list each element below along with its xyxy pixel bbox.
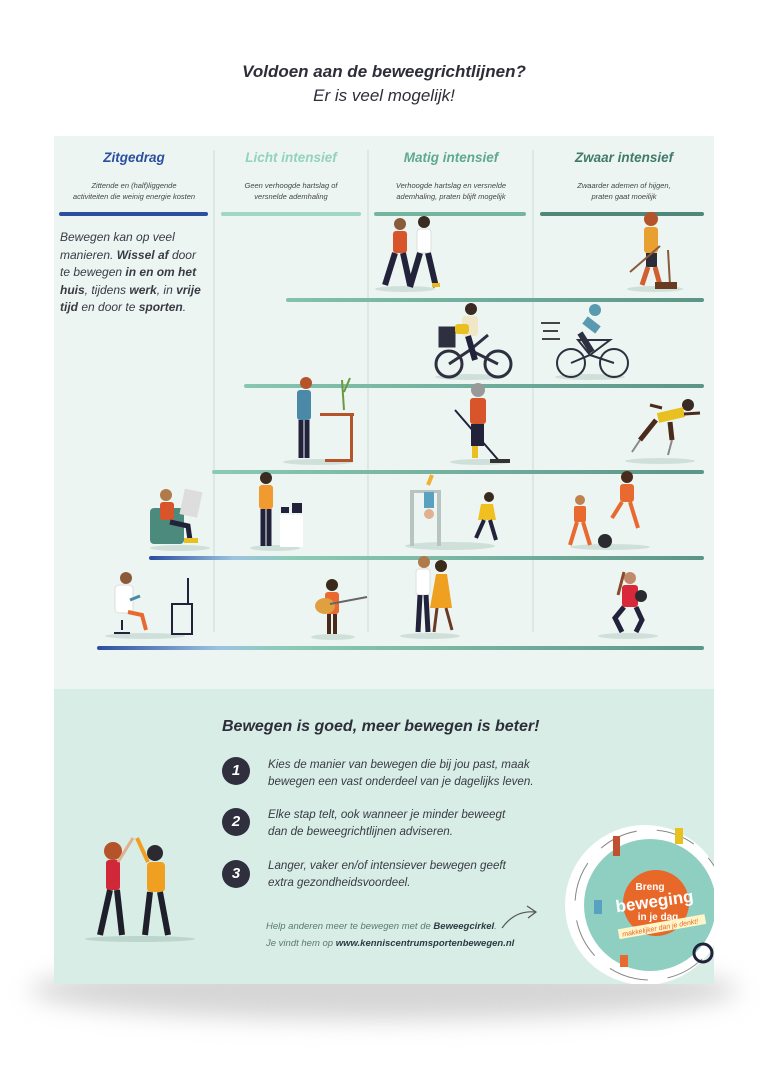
item 3 [222, 859, 506, 889]
text: Matig description [396, 181, 506, 201]
heading: Matig intensief: Matig intensief [404, 150, 498, 165]
item 1: 1 [232, 762, 240, 779]
icon: cooking [259, 472, 303, 547]
icon: sitting with phone and tv [114, 572, 192, 634]
text: Matig description: ademhaling, praten blijft mogelijk [396, 192, 506, 201]
heading: bewegen is goed: Bewegen is goed, meer bewegen is beter! [222, 718, 539, 735]
header lines [61, 214, 702, 648]
title: Er is veel mogelijk! [313, 86, 455, 105]
icon: racing cyclist [541, 304, 628, 377]
text: intro: huis, tijdens werk, in vrije [60, 282, 201, 296]
icon: sweeping [455, 383, 510, 463]
text: Licht description: versnelde ademhaling [254, 192, 328, 201]
text: Zwaar description [577, 181, 671, 201]
text: intro: manieren. Wissel af door [60, 248, 196, 262]
heading: Licht intensief: Licht intensief [245, 150, 337, 165]
heading: Zwaar intensief: Zwaar intensief [575, 150, 673, 165]
panel: bottom card [54, 689, 714, 984]
item 3: Langer, vaker en/of intensiever bewegen geeft [268, 859, 506, 872]
text: Zitgedrag description [73, 181, 195, 201]
icon: high five women [85, 838, 195, 942]
text: Matig description: Verhoogde hartslag en versnelde [396, 181, 506, 190]
chart svg [59, 150, 714, 984]
text: Licht description: Geen verhoogde hartslag of [244, 181, 337, 190]
item 3: 3 [232, 865, 240, 882]
item 2: 2 [232, 813, 240, 830]
item 3: extra gezondheidsvoordeel. [268, 876, 410, 889]
title [242, 62, 526, 105]
text: Zwaar description: praten gaat moeilijk [591, 192, 657, 201]
icon: dancing couple [416, 556, 452, 632]
icon: football [570, 471, 638, 548]
item 2 [222, 808, 506, 838]
icon: beweegcirkel: beweging [614, 887, 695, 916]
icon: sprinter [632, 399, 700, 455]
item 1: Kies de manier van bewegen die bij jou past, maak [268, 758, 530, 771]
item 1 [222, 757, 534, 788]
text: intro: tijd en door te sporten. [60, 300, 186, 314]
icon: beweegcirkel: in je dag [638, 912, 678, 923]
icon: standing desk [297, 377, 354, 462]
heading: Zitgedrag: Zitgedrag [103, 150, 165, 165]
icon: cargo bike [436, 303, 511, 377]
icon: beweegcirkel: Breng [636, 882, 664, 893]
shadows [105, 286, 695, 640]
icon: walkers [385, 216, 440, 287]
item 1: bewegen een vast onderdeel van je dagelijks leven. [268, 775, 534, 788]
icon: guitar [315, 579, 367, 634]
icon: hiker [630, 212, 677, 289]
text: Zwaar description: Zwaarder ademen of hijgen, [577, 181, 671, 190]
shadow [30, 960, 738, 1020]
text: footer note: Help anderen meer te bewegen met de Beweegcirkel. [266, 921, 497, 932]
icon: beweegcirkel: makkelijker dan je denkt! [622, 918, 699, 939]
text: Licht description [244, 181, 338, 201]
text: intro [60, 230, 201, 314]
icon: beweegcirkel [565, 825, 725, 985]
text: Zitgedrag description: activiteiten die weinig energie kosten [73, 192, 195, 201]
icon: kids playing [410, 475, 496, 546]
icon: squat [615, 572, 647, 632]
title: Voldoen aan de beweegrichtlijnen? [242, 62, 526, 81]
arrow: to circle [502, 906, 536, 928]
text: intro: Bewegen kan op veel [60, 230, 175, 244]
item 2: dan de beweegrichtlijnen adviseren. [268, 825, 453, 838]
text: footer note: Je vindt hem op www.kenniscentrumsportenbewegen.nl [266, 938, 514, 949]
panel: chart card [54, 136, 714, 689]
text: intro: te bewegen in en om het [60, 265, 196, 279]
icon: reading in chair [150, 489, 202, 544]
text: Zitgedrag description: Zittende en (half)liggende [91, 181, 177, 190]
text: footer note [266, 921, 514, 949]
item 2: Elke stap telt, ook wanneer je minder beweegt [268, 808, 505, 821]
